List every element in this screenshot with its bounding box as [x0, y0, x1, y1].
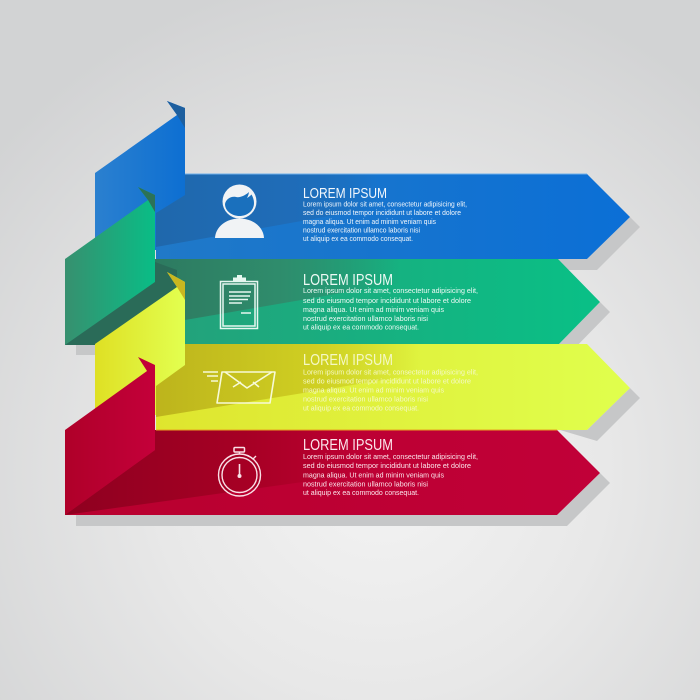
text: yellow block: sed do eiusmod tempor incididunt ut labore et dolore: [303, 376, 471, 386]
blue flag: [95, 101, 185, 250]
text: blue block: sed do eiusmod tempor incididunt ut labore et dolore: [303, 208, 461, 217]
text: yellow block: [303, 352, 478, 412]
panel: green arrow: [65, 187, 600, 345]
text: blue block: LOREM IPSUM: [303, 185, 387, 202]
text: yellow block: nostrud exercitation ullamco laboris nisi: [303, 394, 428, 404]
green fold shading: [155, 259, 400, 325]
text: red block: Lorem ipsum dolor sit amet, consectetur adipisicing elit,: [303, 452, 478, 461]
green band: [65, 259, 600, 345]
blue band: [156, 174, 630, 259]
green flag: [65, 187, 155, 345]
text: yellow block: LOREM IPSUM: [303, 352, 393, 369]
text: blue block: magna aliqua. Ut enim ad minim veniam quis: [303, 217, 436, 226]
dark fold under green flag: [65, 262, 177, 345]
icon: envelope: [203, 372, 275, 403]
red flag: [65, 357, 155, 515]
text: red block: LOREM IPSUM: [303, 437, 393, 454]
text: red block: magna aliqua. Ut enim ad minim veniam quis: [303, 470, 444, 480]
green flag tip: [138, 187, 155, 212]
text: green block: [303, 272, 478, 332]
icon: stopwatch: [218, 448, 260, 496]
panel: red arrow: [65, 357, 600, 515]
text: blue block: [303, 185, 467, 243]
text: blue block: nostrud exercitation ullamco laboris nisi: [303, 226, 420, 234]
text: yellow block: ut aliquip ex ea commodo consequat.: [303, 404, 419, 412]
panel: yellow arrow: [95, 272, 630, 430]
text: red block: sed do eiusmod tempor incididunt ut labore et dolore: [303, 461, 471, 470]
red fold shading: [65, 430, 360, 515]
text: red block: ut aliquip ex ea commodo consequat.: [303, 488, 419, 497]
drop shadows: [76, 217, 640, 526]
text: green block: nostrud exercitation ullamco laboris nisi: [303, 314, 428, 323]
text: yellow block: magna aliqua. Ut enim ad minim veniam quis: [303, 386, 444, 394]
text: green block: LOREM IPSUM: [303, 272, 393, 289]
text: yellow block: Lorem ipsum dolor sit amet, consectetur adipisicing elit,: [303, 368, 478, 376]
yellow flag tip: [167, 272, 185, 300]
yellow flag: [95, 272, 185, 415]
text: red block: nostrud exercitation ullamco laboris nisi: [303, 480, 428, 488]
text: red block: [303, 437, 478, 497]
blue flag tip: [167, 101, 185, 128]
red band: [65, 430, 600, 515]
yellow fold shading: [156, 344, 490, 417]
panel: blue arrow: [95, 101, 630, 259]
text: blue block: ut aliquip ex ea commodo consequat.: [303, 234, 413, 243]
blue fold shading: [156, 174, 380, 247]
text: green block: Lorem ipsum dolor sit amet, consectetur adipisicing elit,: [303, 286, 478, 295]
icon: clipboard: [220, 275, 258, 328]
yellow band: [156, 344, 630, 430]
text: green block: magna aliqua. Ut enim ad minim veniam quis: [303, 305, 444, 314]
text: green block: ut aliquip ex ea commodo consequat.: [303, 322, 419, 332]
text: green block: sed do eiusmod tempor incididunt ut labore et dolore: [303, 296, 471, 305]
icon: person: [215, 184, 264, 238]
text: blue block: Lorem ipsum dolor sit amet, consectetur adipisicing elit,: [303, 200, 467, 208]
